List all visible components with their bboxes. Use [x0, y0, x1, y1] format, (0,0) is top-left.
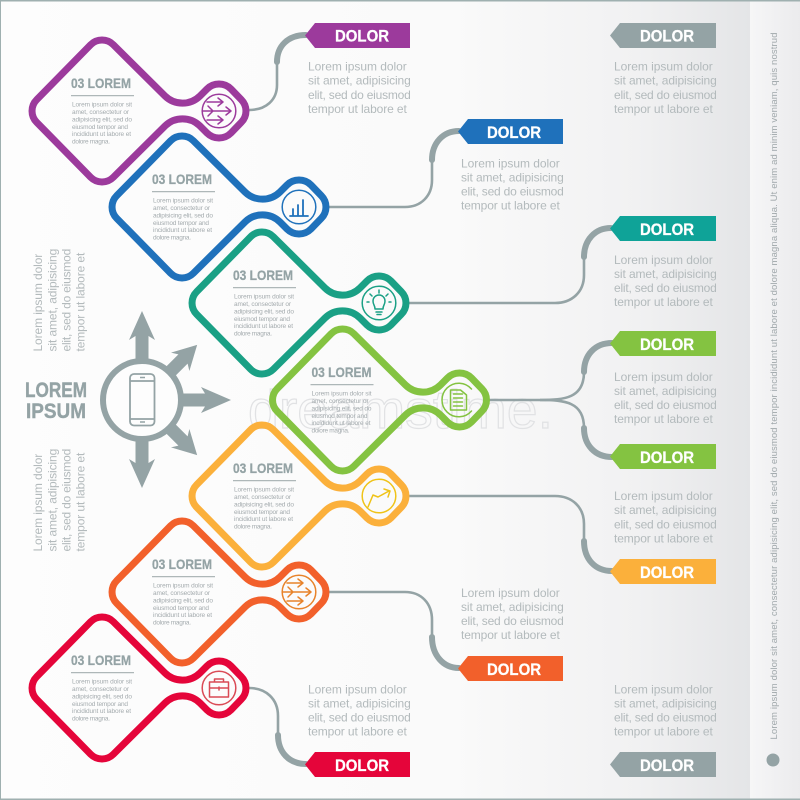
text block: rotated upper	[31, 248, 88, 352]
text block: gray top description: elit, sed do eiusmod	[614, 88, 717, 102]
text block: teal description: tempor ut labore et	[614, 295, 713, 309]
teal text: amet, consectetur or	[234, 301, 292, 308]
watermark: dreamstime.	[248, 380, 553, 440]
tag: blue: DOLOR	[487, 123, 541, 142]
panel: orange step	[112, 521, 326, 663]
orange text: adipisicing elit, sed do	[153, 597, 213, 604]
text block: yellow description: tempor ut labore et	[614, 532, 713, 546]
teal text: eiusmod tempor and	[234, 316, 290, 323]
text block: yellow description: elit, sed do eiusmod	[614, 518, 717, 532]
title: lorem ipsum: IPSUM	[26, 400, 86, 423]
text block: rotated upper: sit amet, adipisicing	[46, 248, 60, 352]
sidebar text: Lorem ipsum dolor sit amet, consectetur adipisicing elit, sed do eiusmod tempor incididunt ut labore et dolore magna aliqua. Ut enim ad minim veniam, quis nostrud	[769, 32, 780, 740]
orange text: eiusmod tempor and	[153, 605, 209, 612]
red outline	[32, 617, 246, 759]
text block: gray bottom description: tempor ut labore et	[614, 724, 713, 738]
orange text: incididunt ut labore et	[153, 612, 212, 619]
icon: trend line	[362, 479, 396, 513]
red text: adipisicing elit, sed do	[72, 693, 132, 700]
text block: rotated upper: Lorem ipsum dolor	[31, 254, 45, 352]
arrow: down	[129, 438, 155, 488]
text block: rotated lower: sit amet, adipisicing	[46, 448, 60, 552]
yellow text: amet, consectetur or	[234, 494, 292, 501]
text block: purple description: tempor ut labore et	[308, 102, 407, 116]
text block: gray bottom description: sit amet, adipisicing	[614, 696, 717, 710]
purple text: amet, consectetur or	[72, 109, 130, 116]
yellow text: incididunt ut labore et	[234, 516, 293, 523]
green heading: 03 LOREM	[312, 364, 372, 380]
text block: rotated upper: elit, sed do eiusmod	[60, 248, 74, 352]
teal heading: 03 LOREM	[233, 267, 293, 283]
text block: red description: tempor ut labore et	[308, 724, 407, 738]
yellow heading: 03 LOREM	[233, 460, 293, 476]
connector: green branches	[489, 343, 612, 457]
blue heading: 03 LOREM	[152, 171, 212, 187]
text block: red description: sit amet, adipisicing	[308, 696, 411, 710]
red text: incididunt ut labore et	[72, 708, 131, 715]
icon: arrows	[282, 575, 316, 609]
purple outline	[32, 40, 246, 182]
yellow text: adipisicing elit, sed do	[234, 501, 294, 508]
panel: purple step	[32, 40, 246, 182]
text block: green description: sit amet, adipisicing	[614, 384, 717, 398]
panel: green step	[273, 329, 486, 471]
green text: dolore magna.	[312, 428, 350, 435]
tag: orange: DOLOR	[487, 660, 541, 679]
text block: yellow description: Lorem ipsum dolor	[614, 489, 713, 503]
blue text: dolore magna.	[153, 235, 191, 242]
panel: blue step	[112, 136, 326, 278]
panel: yellow step	[192, 425, 406, 567]
arrow: right	[180, 387, 231, 413]
connector: red	[249, 688, 306, 764]
text block: teal description: elit, sed do eiusmod	[614, 281, 717, 295]
tag: green lower	[610, 444, 716, 469]
text block: gray top description: tempor ut labore et	[614, 102, 713, 116]
green outline	[273, 329, 486, 471]
text block: green description: tempor ut labore et	[614, 412, 713, 426]
purple text: incididunt ut labore et	[72, 131, 131, 138]
connector: orange	[329, 592, 459, 668]
text block: rotated lower: elit, sed do eiusmod	[60, 448, 74, 552]
teal outline	[192, 232, 406, 374]
teal text: incididunt ut labore et	[234, 323, 293, 330]
text block: purple description: sit amet, adipisicing	[308, 74, 411, 88]
tag: green upper	[610, 331, 716, 356]
teal text: Lorem ipsum dolor sit	[234, 294, 294, 300]
yellow outline	[192, 425, 406, 567]
connector: blue	[329, 131, 459, 207]
text block: green description: elit, sed do eiusmod	[614, 398, 717, 412]
text block: rotated lower	[31, 448, 88, 552]
text block: teal description: Lorem ipsum dolor	[614, 253, 713, 267]
purple text: dolore magna.	[72, 139, 110, 146]
icon: document	[442, 383, 472, 417]
yellow text: dolore magna.	[234, 524, 272, 531]
text block: green description: Lorem ipsum dolor	[614, 370, 713, 384]
red text: dolore magna.	[72, 716, 110, 723]
orange heading: 03 LOREM	[152, 556, 212, 572]
blue text: Lorem ipsum dolor sit	[153, 198, 213, 204]
purple text: eiusmod tempor and	[72, 124, 128, 131]
blue text: eiusmod tempor and	[153, 220, 209, 227]
text block: gray top description: Lorem ipsum dolor	[614, 60, 713, 74]
hub ring	[103, 361, 181, 439]
tag: blue	[458, 119, 563, 144]
text block: teal description: sit amet, adipisicing	[614, 267, 717, 281]
red heading: 03 LOREM	[71, 652, 131, 668]
orange outline	[112, 521, 326, 663]
tag: gray bottom: DOLOR	[640, 756, 694, 775]
title: lorem ipsum: LOREM	[25, 379, 87, 402]
hub: phone with radiating arrows	[103, 311, 231, 488]
tag: purple	[305, 23, 410, 48]
tag: gray bottom	[610, 752, 716, 777]
text block: red description: elit, sed do eiusmod	[308, 710, 411, 724]
panel: red step	[32, 617, 246, 759]
arrow: up	[129, 311, 155, 362]
orange text: Lorem ipsum dolor sit	[153, 582, 213, 590]
sidebar dot	[766, 754, 780, 766]
icon: briefcase	[202, 671, 236, 705]
tag: gray top: DOLOR	[640, 26, 694, 46]
tag: green lower: DOLOR	[640, 448, 694, 467]
connector: yellow	[409, 496, 612, 571]
tag: red: DOLOR	[335, 756, 389, 775]
text block: rotated lower: tempor ut labore et	[74, 452, 88, 552]
text block: purple description: elit, sed do eiusmod	[308, 88, 411, 102]
tag: teal	[610, 216, 716, 241]
tag: purple: DOLOR	[335, 26, 389, 46]
text block: orange description: sit amet, adipisicing	[461, 600, 564, 614]
yellow text: Lorem ipsum dolor sit	[234, 486, 294, 494]
green text: adipisicing elit, sed do	[312, 405, 372, 412]
green text: incididunt ut labore et	[312, 420, 371, 427]
icon: converging arrows	[202, 94, 236, 128]
arrow: up right	[160, 336, 206, 382]
orange text: dolore magna.	[153, 620, 191, 627]
icon: smartphone	[130, 374, 154, 426]
text block: gray bottom description: elit, sed do eiusmod	[614, 710, 717, 724]
blue text: adipisicing elit, sed do	[153, 212, 213, 219]
panel: teal step	[192, 232, 406, 374]
text block: gray top description: sit amet, adipisicing	[614, 74, 717, 88]
tag: yellow	[610, 559, 716, 584]
tag: orange	[458, 656, 563, 681]
tag: teal: DOLOR	[640, 220, 694, 239]
connector: purple	[249, 35, 306, 110]
text block: rotated lower: Lorem ipsum dolor	[31, 454, 45, 552]
text block: blue description: elit, sed do eiusmod	[461, 184, 564, 198]
text block: yellow description: sit amet, adipisicing	[614, 503, 717, 517]
purple heading: 03 LOREM	[71, 75, 131, 91]
green text: Lorem ipsum dolor sit	[312, 390, 372, 398]
tag: gray top	[610, 23, 716, 48]
icon: light bulb	[362, 286, 396, 320]
text block: blue description: sit amet, adipisicing	[461, 170, 564, 184]
text block: red description: Lorem ipsum dolor	[308, 682, 407, 696]
tag: yellow: DOLOR	[640, 563, 694, 582]
red text: eiusmod tempor and	[72, 701, 128, 708]
text block: blue description: Lorem ipsum dolor	[461, 156, 560, 170]
blue outline	[112, 136, 326, 278]
text block: blue description: tempor ut labore et	[461, 198, 560, 212]
icon: bar chart	[282, 190, 316, 224]
text block: orange description: elit, sed do eiusmod	[461, 614, 564, 628]
teal text: dolore magna.	[234, 331, 272, 338]
purple text: Lorem ipsum dolor sit	[72, 102, 132, 108]
orange text: amet, consectetur or	[153, 590, 211, 597]
tag: red	[305, 752, 410, 777]
connector: teal	[409, 228, 611, 303]
text block: orange description: tempor ut labore et	[461, 628, 560, 642]
tag: green upper: DOLOR	[640, 335, 694, 354]
teal text: adipisicing elit, sed do	[234, 308, 294, 315]
red text: Lorem ipsum dolor sit	[72, 678, 132, 686]
text block: orange description: Lorem ipsum dolor	[461, 586, 560, 600]
green text: eiusmod tempor and	[312, 413, 368, 420]
green text: amet, consectetur or	[312, 398, 369, 405]
purple text: adipisicing elit, sed do	[72, 116, 132, 123]
text block: rotated upper: tempor ut labore et	[74, 252, 88, 352]
blue text: incididunt ut labore et	[153, 227, 212, 234]
red text: amet, consectetur or	[72, 686, 130, 693]
yellow text: eiusmod tempor and	[234, 509, 290, 516]
blue text: amet, consectetur or	[153, 205, 211, 212]
text block: purple description: Lorem ipsum dolor	[308, 60, 407, 74]
text block: gray bottom description: Lorem ipsum dolor	[614, 682, 713, 696]
arrow: down right	[160, 418, 206, 464]
